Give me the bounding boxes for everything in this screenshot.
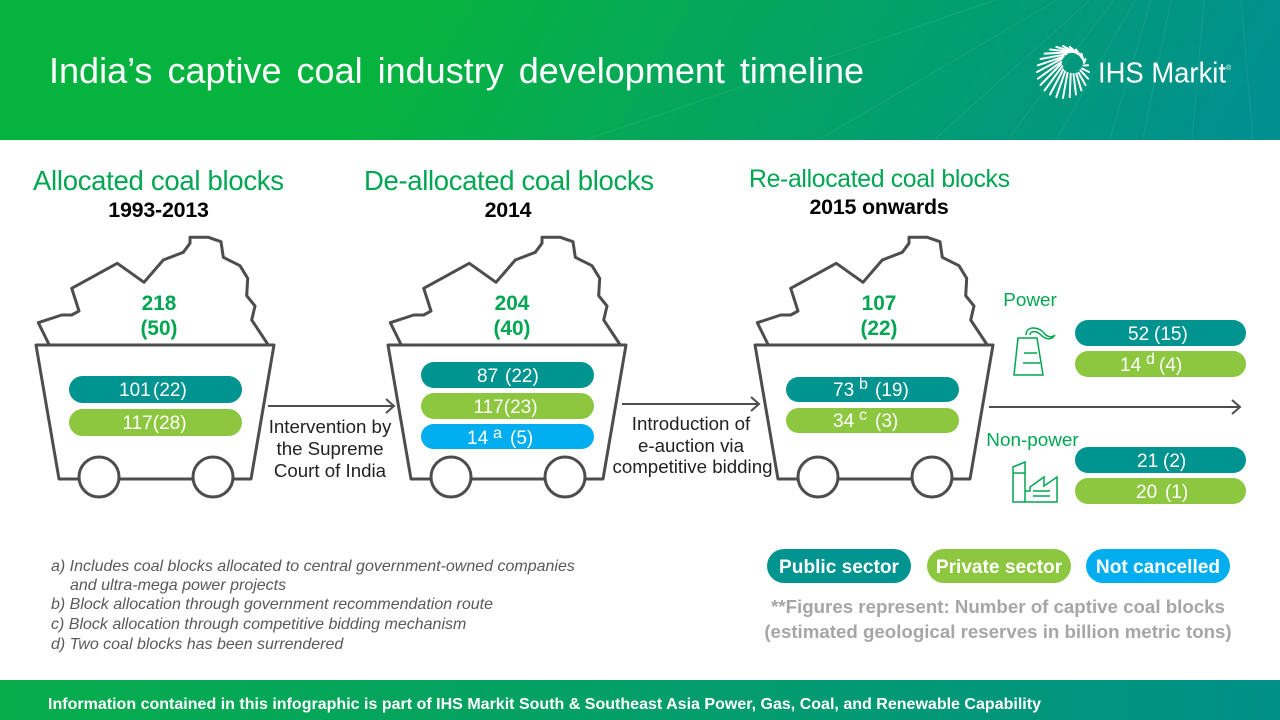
note: what figures represent: (estimated geological reserves in billion metric tons) — [764, 621, 1232, 642]
legend — [767, 549, 1230, 583]
total: 204 (40): 204 — [495, 292, 530, 315]
footer text: Information contained in this infographic is part of IHS Markit South & Southeast Asia Power, Gas, Coal, and Renewable Capability — [48, 696, 1041, 713]
title: India’s captive coal industry development timeline — [49, 50, 864, 91]
pill: private 20 (1): (1) — [1165, 482, 1188, 503]
heading: allocated: Allocated coal blocks — [33, 165, 284, 196]
footnotes — [51, 558, 575, 653]
pill: private 14 (4): d — [1146, 351, 1155, 368]
pill: private 14 (4): 14 — [1120, 355, 1142, 376]
logo: IHS Markit — [1037, 46, 1232, 98]
label: e-auction — [613, 413, 772, 477]
legend: private sector: Private sector — [936, 557, 1063, 578]
arrow: supreme court — [268, 399, 394, 413]
cart: de-allocated — [388, 237, 626, 497]
pill: private 14 (4) — [1075, 351, 1246, 377]
total: 218 (50) — [141, 292, 177, 340]
footnotes: c) Block allocation through competitive bidding mechanism — [51, 616, 466, 633]
pill: not cancelled 14 (5): 14 — [467, 428, 489, 449]
pill: public 101 (22): (22) — [153, 380, 187, 401]
pill: public 73 (19): b — [859, 376, 868, 393]
label: power: Power — [1003, 290, 1057, 311]
header banner — [0, 0, 1280, 140]
icon: power plant — [1014, 328, 1055, 375]
non-power sector group — [986, 430, 1246, 504]
pill: public 21 (2): 21 — [1137, 451, 1158, 472]
label: supreme court intervention: Court of India — [274, 460, 387, 481]
total: 107 (22): (22) — [861, 317, 897, 340]
note: what figures represent — [764, 596, 1232, 642]
legend: private sector — [927, 549, 1071, 583]
icon: logo starburst — [1037, 46, 1089, 98]
panel: de-allocated coal blocks — [364, 165, 654, 497]
pill: private 117 (28) — [69, 409, 242, 436]
pill: public 87 (22): (22) — [505, 366, 539, 387]
pill: public 73 (19): 73 — [833, 380, 854, 401]
logo wordmark: IHS Markit — [1098, 58, 1226, 90]
arrow: split to sectors — [989, 400, 1240, 414]
cart: re-allocated — [755, 237, 993, 497]
pill: private 117 (23) — [421, 393, 594, 419]
total: 107 (22) — [861, 292, 897, 340]
pill: public 87 (22) — [421, 362, 594, 388]
pill: private 20 (1): 20 — [1136, 482, 1157, 503]
pill: not cancelled 14 (5) — [421, 424, 594, 449]
label: supreme court intervention: Intervention by — [269, 416, 392, 437]
label: supreme court intervention — [269, 416, 392, 481]
icon: factory — [1013, 462, 1057, 502]
pill: public 101 (22) — [69, 376, 242, 403]
label: e-auction: e-auction via — [638, 435, 745, 456]
pill: private 34 (3): (3) — [875, 411, 898, 432]
total: 107 (22): 107 — [862, 292, 896, 315]
power sector group — [1003, 290, 1246, 377]
pill: public 21 (2) — [1075, 447, 1246, 473]
panel: re-allocated coal blocks — [749, 166, 1010, 497]
legend: public sector: Public sector — [779, 557, 900, 578]
arrow: e-auction — [622, 397, 759, 411]
total: 218 (50): (50) — [141, 317, 177, 340]
pill: public 87 (22): 87 — [477, 366, 498, 387]
footnotes: d) Two coal blocks has been surrendered — [51, 636, 344, 653]
footnotes: a) Includes coal blocks allocated to central government-owned companies — [51, 558, 575, 575]
pill: private 34 (3): 34 — [833, 411, 855, 432]
footnotes: and ultra-mega power projects — [70, 577, 286, 594]
label: supreme court intervention: the Supreme — [276, 438, 384, 459]
label: e-auction: Introduction of — [632, 413, 751, 434]
label: non-power: Non-power — [986, 430, 1079, 451]
pill: private 14 (4): (4) — [1159, 355, 1182, 376]
legend: public sector — [767, 549, 911, 583]
legend: not cancelled — [1086, 549, 1230, 583]
pill: private 117 (28): 117(28) — [122, 413, 187, 434]
label: e-auction: competitive bidding — [613, 456, 772, 477]
pill: private 34 (3) — [786, 407, 959, 433]
period: 2015 onwards: 2015 onwards — [809, 195, 949, 219]
pill: not cancelled 14 (5): (5) — [510, 428, 533, 449]
total: 204 (40): (40) — [494, 317, 530, 340]
pill: not cancelled 14 (5): a — [493, 425, 502, 442]
legend: not cancelled: Not cancelled — [1096, 557, 1220, 578]
panel: allocated coal blocks — [33, 165, 284, 497]
registered mark: ® — [1226, 64, 1232, 72]
footnotes: b) Block allocation through government recommendation route — [51, 596, 493, 613]
pill: public 52 (15) — [1075, 320, 1246, 346]
total: 204 (40) — [494, 292, 530, 340]
pill: public 52 (15): 52 — [1128, 324, 1149, 345]
heading: de-allocated: De-allocated coal blocks — [364, 165, 654, 196]
total: 218 (50): 218 — [142, 292, 176, 315]
pill: public 73 (19) — [786, 376, 959, 402]
pill: public 21 (2): (2) — [1163, 451, 1186, 472]
pill: private 20 (1) — [1075, 478, 1246, 504]
pill: private 34 (3): c — [859, 407, 867, 424]
pill: public 73 (19): (19) — [875, 380, 909, 401]
pill: private 117 (23): 117(23) — [473, 397, 538, 418]
period: 2014: 2014 — [485, 198, 532, 222]
heading: re-allocated: Re-allocated coal blocks — [749, 166, 1010, 193]
cart: allocated — [36, 237, 274, 497]
note: what figures represent: **Figures represent: Number of captive coal blocks — [771, 596, 1225, 617]
footer bar — [0, 680, 1280, 720]
pill: public 101 (22): 101 — [119, 380, 151, 401]
pill: public 52 (15): (15) — [1154, 324, 1188, 345]
period: 1993-2013: 1993-2013 — [108, 198, 209, 222]
